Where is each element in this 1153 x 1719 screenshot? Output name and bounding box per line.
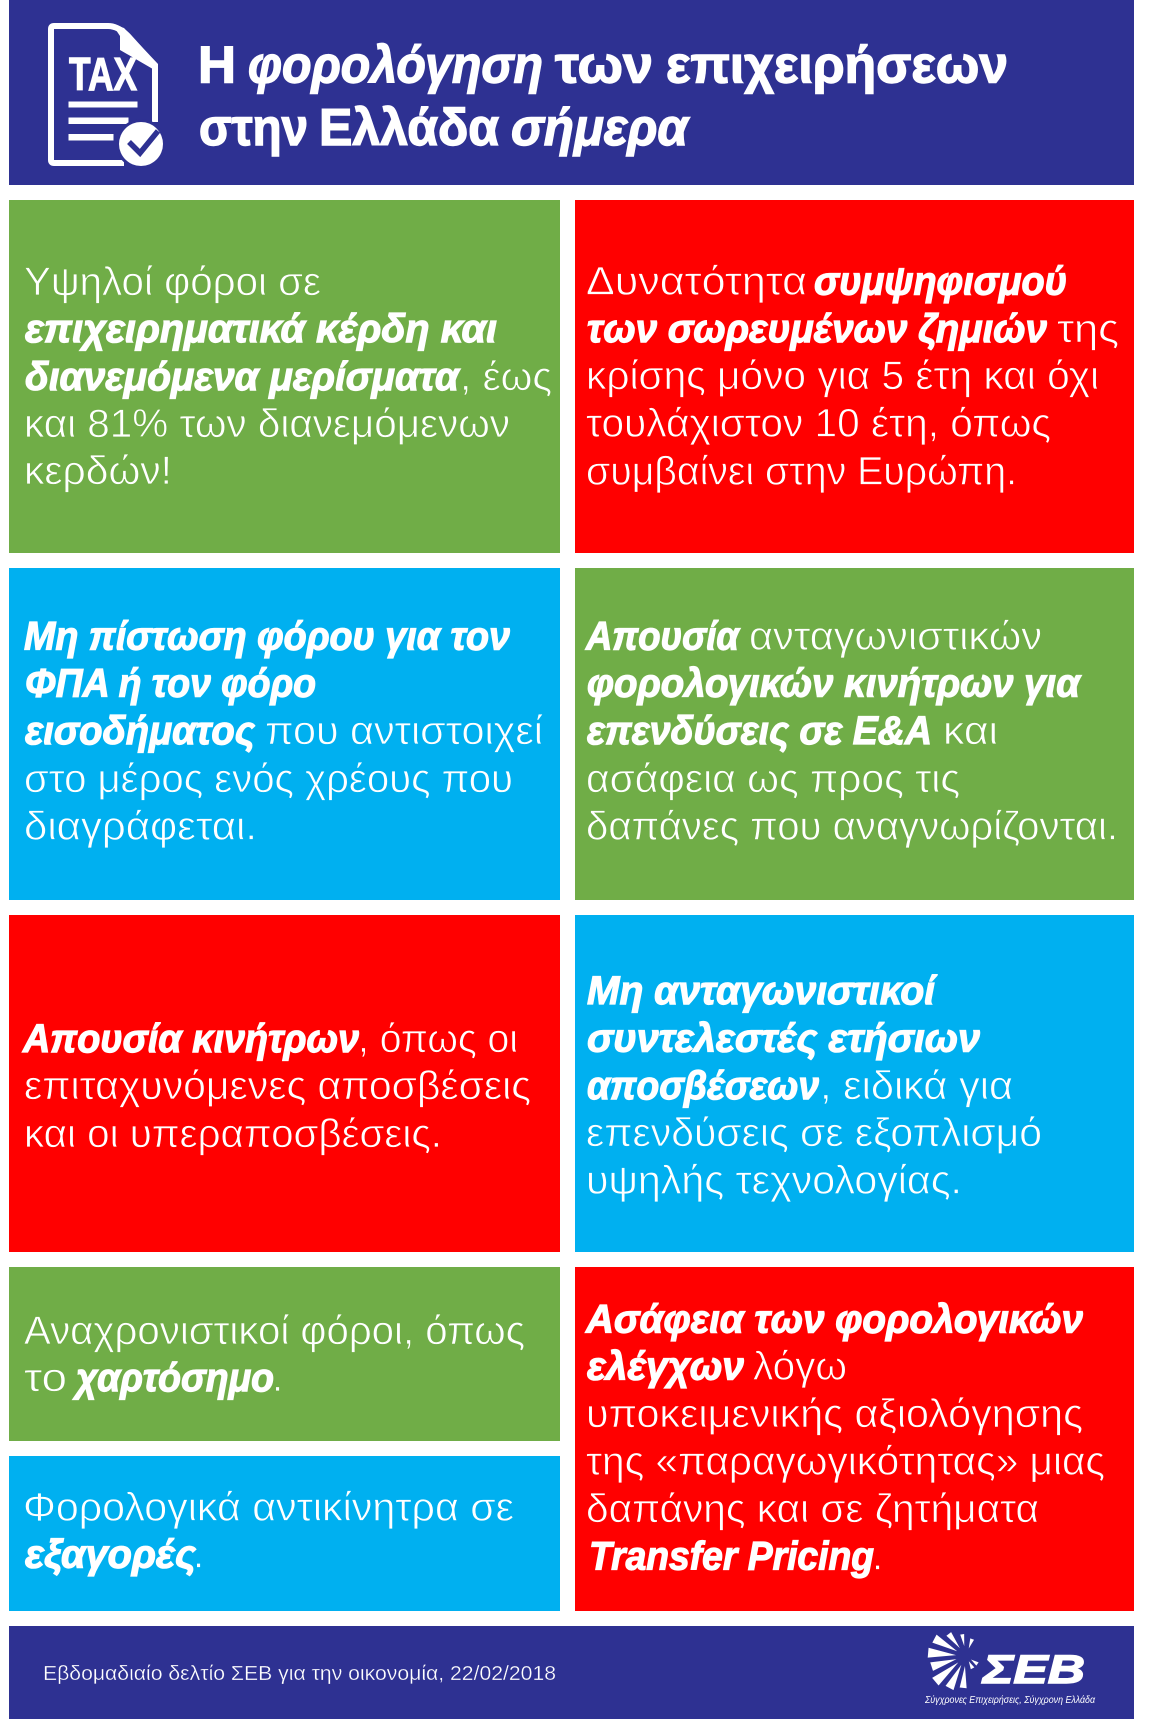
panel text: Υψηλοί φόροι σε <box>24 260 321 304</box>
icon: tax document with check mark: TAX <box>69 48 137 100</box>
panel: no tax credit for VAT or income tax <box>9 568 560 900</box>
title: φορολόγηση <box>248 37 543 95</box>
panel text: στο μέρος ενός χρέους που <box>24 757 513 801</box>
panel text: διαγράφεται. <box>24 804 257 848</box>
panel text <box>24 260 552 493</box>
panel: anachronistic taxes <box>9 1267 560 1441</box>
logo wordmark: ΣΕΒ <box>982 1648 1085 1692</box>
panel: no incentives such as accelerated depreciation <box>9 915 560 1252</box>
panel: high taxes on profits and dividends <box>9 200 560 553</box>
panel text: Μη ανταγωνιστικοί <box>587 969 938 1013</box>
panel text <box>23 1486 514 1576</box>
panel text: ανταγωνιστικών <box>749 614 1042 658</box>
panel: tax disincentives for exports <box>9 1456 560 1611</box>
panel text <box>24 1309 525 1400</box>
title: στην <box>199 99 308 157</box>
panel text: , όπως οι <box>358 1017 518 1061</box>
panel text: υποκειμενικής αξιολόγησης <box>586 1392 1083 1436</box>
panel text: επενδύσεις σε εξοπλισμό <box>586 1111 1042 1155</box>
logo globe rays <box>928 1632 979 1690</box>
panel text: διανεμόμενα μερίσματα <box>25 355 461 399</box>
panel text: και <box>943 709 998 753</box>
panel text: αποσβέσεων <box>587 1064 819 1108</box>
panel text: . <box>193 1532 204 1576</box>
icon: tax document with check mark <box>51 24 166 169</box>
panel text: Απουσία κινήτρων <box>22 1017 359 1061</box>
source note: Εβδομαδιαίο δελτίο ΣΕΒ για την οικονομία, 22/02/2018 <box>43 1662 556 1685</box>
panel text: ελέγχων <box>587 1344 744 1388</box>
panel text: δαπάνης και σε ζητήματα <box>586 1487 1039 1531</box>
panel text <box>585 1297 1105 1578</box>
panel text <box>24 614 543 848</box>
title: Η <box>198 37 236 95</box>
panel text: επιταχυνόμενες αποσβέσεις <box>24 1064 531 1108</box>
footer banner <box>9 1626 1134 1719</box>
title: σήμερα <box>511 99 691 157</box>
panel text: κερδών! <box>24 449 172 493</box>
panel text: ασάφεια ως προς τις <box>586 757 960 801</box>
panel text: υψηλής τεχνολογίας. <box>586 1158 962 1202</box>
logo tagline: Σύγχρονες Επιχειρήσεις, Σύγχρονη Ελλάδα <box>924 1694 1096 1706</box>
panel: offset of accumulated losses <box>575 200 1134 553</box>
panel text: φορολογικών κινήτρων για <box>587 662 1082 706</box>
panel text: , ειδικά για <box>820 1064 1013 1108</box>
panel text: Ασάφεια των φορολογικών <box>585 1297 1083 1341</box>
title <box>198 37 1008 157</box>
panel text: συμβαίνει στην Ευρώπη. <box>586 449 1017 493</box>
panel text: Μη πίστωση φόρου για τον <box>24 614 510 658</box>
panel text: και οι υπεραποσβέσεις. <box>24 1112 442 1156</box>
panel text: τουλάχιστον 10 έτη, όπως <box>586 402 1051 446</box>
panel text: της <box>1057 307 1119 351</box>
panel text <box>22 1017 531 1156</box>
panel text: εισοδήματος <box>25 709 256 753</box>
panel text: ΦΠΑ ή τον φόρο <box>25 662 316 706</box>
title: επιχειρήσεων <box>666 37 1008 95</box>
header banner <box>9 0 1134 185</box>
panel text: το <box>24 1356 67 1400</box>
panel text: των σωρευμένων ζημιών <box>587 307 1047 351</box>
panel: vague tax audits <box>575 1267 1134 1611</box>
panel text: της «παραγωγικότητας» μιας <box>586 1440 1105 1484</box>
panel: uncompetitive depreciation rates <box>575 915 1134 1252</box>
panel text: Δυνατότητα <box>586 260 807 304</box>
panel text: που αντιστοιχεί <box>265 709 543 753</box>
panel text: . <box>272 1356 283 1400</box>
panel text: χαρτόσημο <box>72 1356 274 1400</box>
panel text <box>586 260 1119 493</box>
panel text: . <box>872 1534 883 1578</box>
panel: no competitive R&D incentives <box>575 568 1134 900</box>
panel text: επενδύσεις σε Ε&Α <box>587 709 932 753</box>
panel text <box>585 614 1118 848</box>
panel text: , έως <box>460 355 552 399</box>
panel text: Φορολογικά αντικίνητρα σε <box>23 1486 514 1530</box>
panel text: επιχειρηματικά κέρδη και <box>25 307 497 351</box>
panel text: εξαγορές <box>25 1532 197 1576</box>
panel text <box>586 969 1042 1202</box>
panel text: Απουσία <box>585 614 741 658</box>
panel text: δαπάνες που αναγνωρίζονται. <box>586 804 1118 848</box>
panel text: συμψηφισμού <box>814 260 1067 304</box>
panel text: συντελεστές ετήσιων <box>587 1017 980 1061</box>
logo: SEB <box>924 1632 1096 1706</box>
panel text: Αναχρονιστικοί φόροι, όπως <box>24 1309 525 1353</box>
panel text: κρίσης μόνο για 5 έτη και όχι <box>586 354 1099 398</box>
panel text: Transfer Pricing <box>589 1534 874 1578</box>
title: Ελλάδα <box>319 99 499 157</box>
title: των <box>555 37 653 95</box>
panel text: και 81% των διανεμόμενων <box>24 402 510 446</box>
panel text: λόγω <box>753 1344 847 1388</box>
